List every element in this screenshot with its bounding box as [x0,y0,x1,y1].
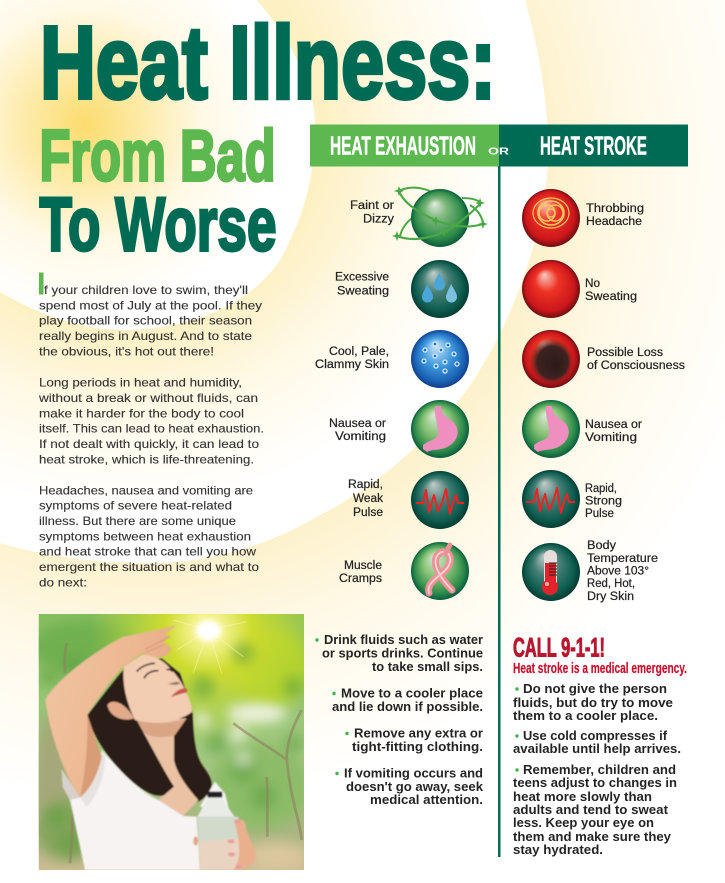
column: heat exhaustion symptoms [315,186,488,600]
column: heat stroke symptoms [522,189,685,603]
symptom: nausea or vomiting: Nausea or [329,418,386,430]
symptom: rapid strong pulse: Strong [585,496,622,508]
list: heat stroke actions: available until help arrives. [513,742,681,756]
header bar: heat exhaustion or heat stroke: OR [488,146,510,158]
symptom: cool pale clammy skin: Clammy Skin [315,359,389,371]
intro text: itself. This can lead to heat exhaustion. [39,422,264,436]
list: heat stroke actions: them to a cooler place. [513,709,658,723]
intro text: emergent the situation is and what to [39,560,259,574]
symptom: excessive sweating: Sweating [337,286,389,298]
header bar: heat exhaustion or heat stroke [310,124,688,166]
neck and chest [137,718,198,816]
symptom: rapid weak pulse: Weak [353,493,383,505]
symptom: body temperature above 103: Above 103° [587,566,649,578]
center divider [498,166,500,857]
symptom: muscle cramps: Muscle [344,560,382,572]
symptom: body temperature above 103: Red, Hot, [587,578,635,590]
symptom: body temperature above 103 [522,540,658,603]
arm [45,625,177,797]
list: heat exhaustion actions: Drink fluids such as water [324,633,483,647]
hair [87,658,212,802]
symptom: rapid weak pulse [348,471,469,529]
symptom: rapid strong pulse: Rapid, [585,483,617,495]
symptom: excessive sweating: Excessive [335,272,389,284]
intro text: illness. But there are some unique [39,514,236,528]
list: heat exhaustion actions: doesn't go away, seek [346,780,483,794]
intro text: play football for school, their season [39,314,252,328]
symptom: possible loss of consciousness: of Consciousness [587,360,685,372]
symptom: rapid strong pulse: Pulse [585,508,614,520]
list: heat stroke actions: adults and tend to sweat [513,803,669,817]
intro text: symptoms of severe heat-related [39,499,232,513]
symptom: possible loss of consciousness: Possible Loss [587,347,663,359]
symptom: no sweating [522,260,637,318]
subtitle: From Bad To Worse: From Bad [40,116,276,196]
list: heat exhaustion actions [315,633,483,807]
symptom: body temperature above 103: Body [587,540,616,552]
symptom: body temperature above 103: Dry Skin [587,591,634,603]
symptom: throbbing headache [522,189,644,247]
header bar: heat exhaustion or heat stroke: HEAT EXHAUSTION [330,130,476,160]
list: heat stroke actions: them and make sure they [513,830,671,844]
call 9-1-1 heading [513,632,687,677]
symptom: nausea or vomiting [522,400,642,458]
symptom: nausea or vomiting [329,400,469,458]
list: heat stroke actions: stay hydrated. [513,843,603,857]
symptom: body temperature above 103: Temperature [587,553,658,565]
symptom: throbbing headache: Headache [586,216,642,228]
symptom: nausea or vomiting: Nausea or [585,419,642,431]
intro text: Headaches, nausea and vomiting are [39,483,253,497]
intro text: spend most of July at the pool. If they [39,298,262,312]
face [123,655,192,722]
symptom: no sweating: Sweating [585,291,637,303]
symptom: no sweating: No [585,278,600,290]
list: heat stroke actions [513,682,681,857]
intro text: heat stroke, which is life-threatening. [39,452,254,466]
list: heat stroke actions: fluids, but do try to move [513,696,673,710]
symptom: muscle cramps: Cramps [339,573,382,585]
intro text: the obvious, it's hot out there! [39,344,214,358]
list: heat exhaustion actions: to take small sips. [372,660,483,674]
intro text: Long periods in heat and humidity, [39,376,242,390]
list: heat stroke actions: less. Keep your eye on [513,816,654,830]
intro text: symptoms between heat exhaustion [39,529,251,543]
symptom: possible loss of consciousness [522,330,685,388]
subtitle: From Bad To Worse: To Worse [40,182,276,268]
symptom: nausea or vomiting: Vomiting [585,432,637,444]
symptom: rapid weak pulse: Pulse [353,507,383,519]
symptom: rapid strong pulse [522,470,622,528]
list: heat exhaustion actions: Remove any extra or [354,727,483,741]
list: heat exhaustion actions: tight-fitting clothing. [352,740,483,754]
call 9-1-1 heading: CALL 9-1-1! [513,632,605,662]
list: heat stroke actions: Use cold compresses if [523,729,668,743]
symptom: rapid weak pulse: Rapid, [348,479,383,491]
hand [233,819,256,870]
subtitle: From Bad To Worse [40,116,276,268]
intro text: without a break or without fluids, can [38,391,258,405]
symptom: faint or dizzy [350,186,488,247]
symptom: faint or dizzy: Dizzy [363,214,394,226]
list: heat stroke actions: heat more slowly than [513,790,652,804]
intro text: If not dealt with quickly, it can lead to [39,437,259,451]
title: Heat Illness: Heat Illness: [40,5,496,120]
list: heat stroke actions: teens adjust to changes in [513,776,677,790]
symptom: cool pale clammy skin: Cool, Pale, [329,346,389,358]
photo: woman shading eyes from the sun holding water bottle [30,614,310,870]
symptom: faint or dizzy: Faint or [350,200,394,212]
symptom: muscle cramps [339,542,469,600]
intro text [38,272,264,589]
intro text: really begins in August. And to state [39,329,252,343]
list: heat stroke actions: Remember, children and [523,763,676,777]
symptom: excessive sweating [335,260,469,318]
symptom: nausea or vomiting: Vomiting [335,431,386,443]
list: heat stroke actions: Do not give the person [523,682,667,696]
bottle [207,792,222,798]
list: heat exhaustion actions: and lie down if possible. [332,700,483,714]
intro text: and heat stroke that can tell you how [39,545,256,559]
list: heat exhaustion actions: medical attention. [370,793,483,807]
shirt [62,750,200,870]
header bar: heat exhaustion or heat stroke: HEAT STROKE [540,130,647,160]
intro text: f your children love to swim, they'll [44,283,248,297]
drop cap bar [39,272,44,294]
list: heat exhaustion actions: or sports drinks. Continue [322,647,483,661]
list: heat exhaustion actions: Move to a cooler place [341,686,483,700]
intro text: do next: [39,575,87,589]
symptom: cool pale clammy skin [315,330,469,388]
intro text: make it harder for the body to cool [39,406,244,420]
list: heat exhaustion actions: If vomiting occurs and [344,767,483,781]
symptom: throbbing headache: Throbbing [586,203,644,215]
woman figure [45,625,256,870]
